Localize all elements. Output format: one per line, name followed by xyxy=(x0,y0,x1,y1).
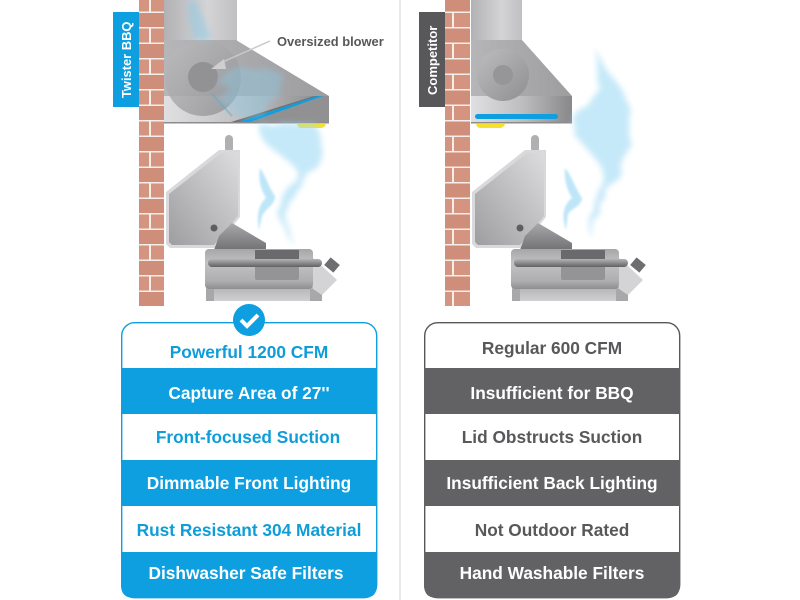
smoke plume xyxy=(564,50,632,238)
yellow lamp xyxy=(297,124,326,128)
range hood xyxy=(471,0,572,124)
callout: Oversized blower: Oversized blower xyxy=(277,34,384,49)
brick wall xyxy=(139,0,164,306)
gas grill xyxy=(166,135,340,301)
row: Hand Washable Filters: Hand Washable Filters xyxy=(460,563,644,583)
row: Not Outdoor Rated: Not Outdoor Rated xyxy=(475,520,629,540)
panel: Twister BBQ feature table xyxy=(121,342,377,598)
panel: Competitor feature table xyxy=(424,323,680,598)
row: Front-focused Suction: Front-focused Suction xyxy=(156,427,340,447)
row: Dimmable Front Lighting: Dimmable Front Lighting xyxy=(147,473,351,493)
range hood with oversized blower xyxy=(164,0,329,124)
row: Insufficient Back Lighting: Insufficient Back Lighting xyxy=(446,473,658,493)
row: Capture Area of 27" xyxy=(121,368,377,414)
smoke plume xyxy=(258,125,322,246)
label: Competitor: Competitor xyxy=(425,26,440,95)
row: Insufficient for BBQ: Insufficient for BBQ xyxy=(470,383,634,403)
label: Twister BBQ xyxy=(113,12,139,107)
label: Twister BBQ: Twister BBQ xyxy=(119,22,134,98)
panel: Competitor illustration xyxy=(419,0,646,306)
gas grill xyxy=(472,135,646,301)
row: Hand Washable Filters xyxy=(424,552,680,598)
row: Dimmable Front Lighting xyxy=(121,460,377,506)
callout: Oversized blower xyxy=(211,34,384,69)
yellow lamp xyxy=(476,124,505,128)
panel: Twister BBQ illustration xyxy=(113,0,384,306)
row: Dishwasher Safe Filters xyxy=(121,552,377,598)
brick wall xyxy=(445,0,470,306)
blue airflow inside hood xyxy=(184,0,283,120)
row: Lid Obstructs Suction: Lid Obstructs Suction xyxy=(462,427,642,447)
table outline xyxy=(425,323,680,598)
label: Competitor xyxy=(419,12,445,107)
center divider xyxy=(399,0,401,600)
row: Dishwasher Safe Filters: Dishwasher Safe Filters xyxy=(149,563,343,583)
row: Capture Area of 27": Capture Area of 27'' xyxy=(168,383,330,403)
row: Insufficient for BBQ xyxy=(424,368,680,414)
row: Insufficient Back Lighting xyxy=(424,460,680,506)
row: Powerful 1200 CFM: Powerful 1200 CFM xyxy=(170,342,328,362)
row: Regular 600 CFM: Regular 600 CFM xyxy=(482,338,622,358)
row: Rust Resistant 304 Material: Rust Resistant 304 Material xyxy=(137,520,361,540)
check badge xyxy=(122,304,377,598)
